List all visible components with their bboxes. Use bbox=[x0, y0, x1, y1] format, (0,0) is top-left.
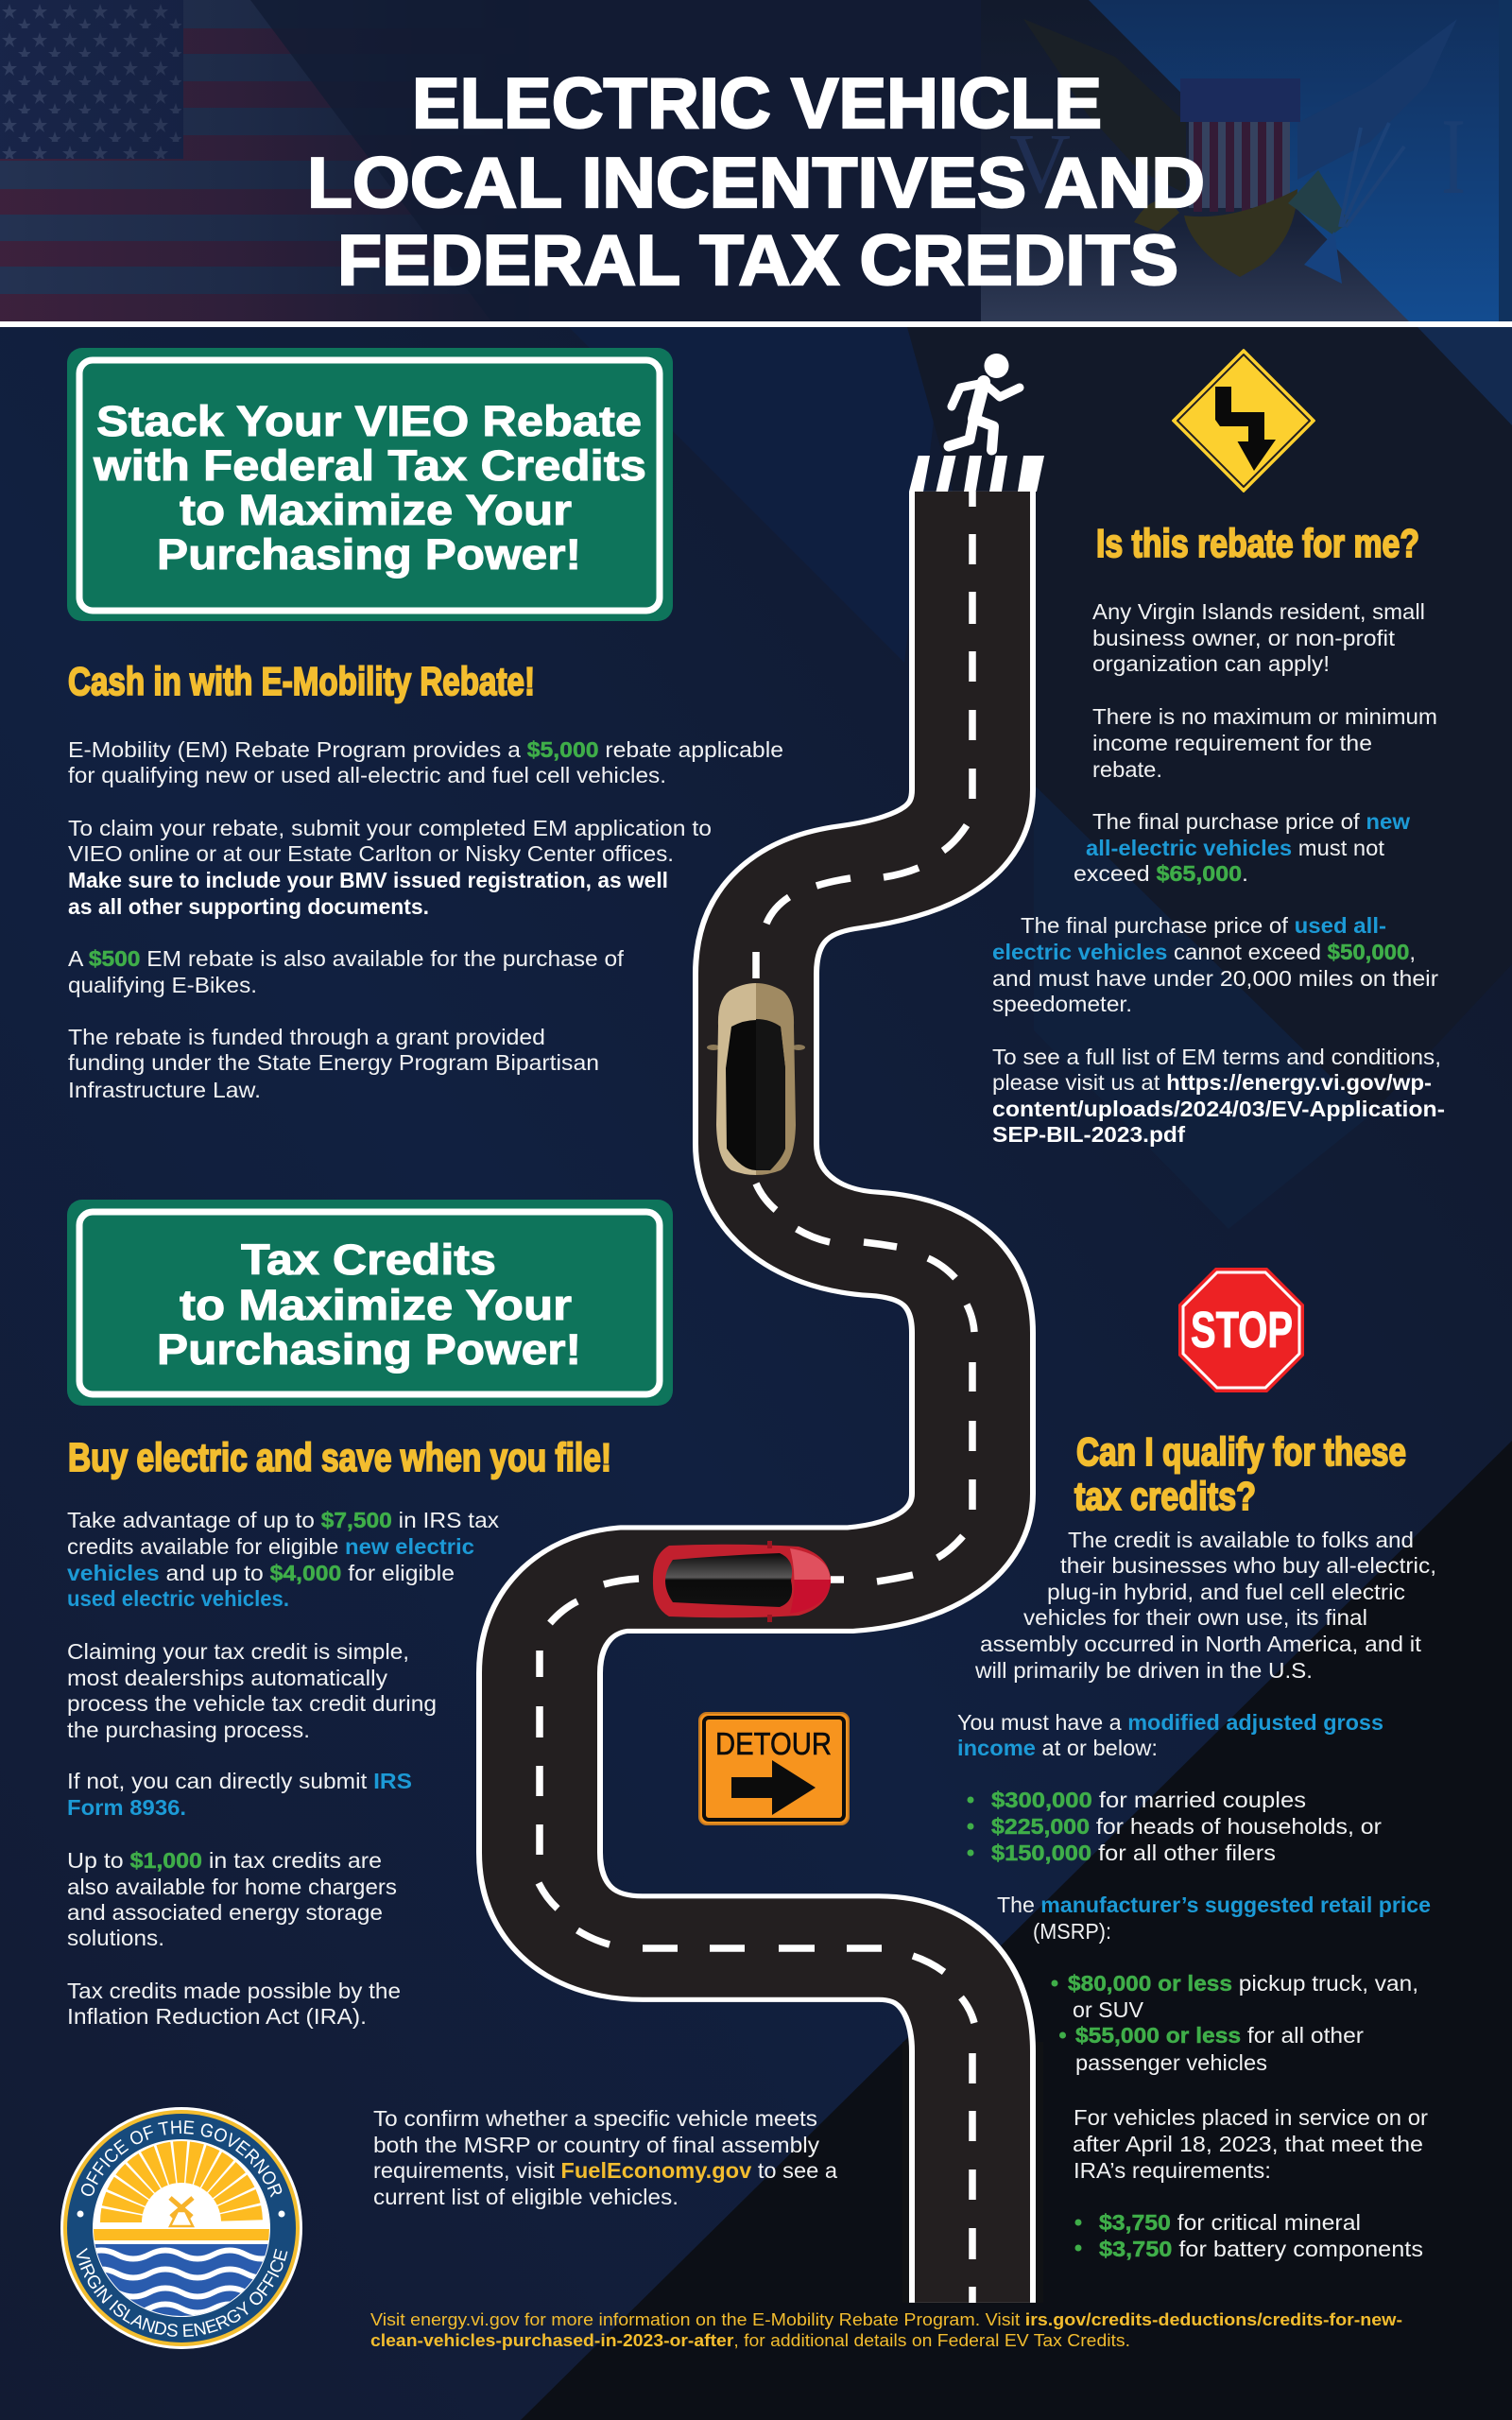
text block: confirm vehicle eligibility: current list of eligible vehicles. bbox=[373, 2185, 679, 2209]
text block: tax credit details: solutions. bbox=[67, 1926, 164, 1950]
text block: tax credit details: Tax credits made possible by the bbox=[67, 1979, 401, 2003]
title: ELECTRIC VEHICLE bbox=[412, 63, 1102, 143]
text block: rebate eligibility: exceed $65,000. bbox=[1074, 861, 1248, 886]
heading: is this rebate for me: Is this rebate for me? bbox=[1096, 521, 1419, 565]
text block: e-mobility rebate: To claim your rebate, submit your completed EM application to bbox=[68, 816, 712, 840]
text block: tax credit details: most dealerships automatically bbox=[67, 1666, 387, 1690]
text block: tax credit details: Up to $1,000 in tax credits are bbox=[67, 1848, 382, 1873]
text block: rebate eligibility: business owner, or non-profit bbox=[1092, 626, 1395, 650]
text block: qualification: will primarily be driven in the U.S. bbox=[974, 1658, 1313, 1683]
list: component credits: $3,750 for battery components bbox=[1099, 2237, 1423, 2261]
footer note: clean-vehicles-purchased-in-2023-or-after , for additional details on Federal EV Tax Credits. bbox=[370, 2331, 1130, 2350]
text block: qualification: their businesses who buy all-electric, bbox=[1060, 1553, 1436, 1578]
Virgin Islands flag: I bbox=[1441, 96, 1466, 216]
green sign: stack rebate: to Maximize Your bbox=[180, 486, 572, 534]
text block: e-mobility rebate bbox=[68, 737, 783, 1102]
text block: rebate eligibility bbox=[992, 599, 1445, 1147]
text block: rebate eligibility: income requirement for the bbox=[1092, 731, 1372, 755]
green sign: stack rebate bbox=[67, 348, 673, 621]
icon: crosswalk bbox=[909, 456, 1044, 492]
text block: tax credit details: If not, you can directly submit IRS bbox=[67, 1769, 412, 1793]
list: MSRP limits: $80,000 or less pickup truck, van, bbox=[1068, 1971, 1418, 1996]
text block: confirm vehicle eligibility bbox=[373, 2106, 838, 2209]
header banner with flags bbox=[0, 0, 1512, 327]
title: LOCAL INCENTIVES AND bbox=[307, 143, 1205, 222]
text block: qualification: The manufacturer’s suggested retail price bbox=[997, 1893, 1431, 1917]
eagle wings bbox=[1023, 19, 1186, 194]
Virgin Islands flag bbox=[981, 0, 1512, 321]
text block: confirm vehicle eligibility: To confirm whether a specific vehicle meets bbox=[373, 2106, 817, 2131]
list: income limits: $300,000 for married couples bbox=[991, 1788, 1306, 1812]
text block: e-mobility rebate: The rebate is funded through a grant provided bbox=[68, 1025, 545, 1049]
text block: e-mobility rebate: Infrastructure Law. bbox=[68, 1078, 261, 1102]
text block: rebate eligibility: content/uploads/2024/03/EV-Application- bbox=[992, 1097, 1445, 1121]
text block: qualification: assembly occurred in North America, and it bbox=[980, 1632, 1421, 1656]
text block: tax credit details: and associated energy storage bbox=[67, 1900, 383, 1925]
text block: qualification: The credit is available to folks and bbox=[1068, 1528, 1414, 1552]
logo: Virgin Islands Energy Office: OFFICE OF THE GOVERNOR bbox=[81, 2120, 282, 2198]
text block: e-mobility rebate: for qualifying new or used all-electric and fuel cell vehicles. bbox=[68, 763, 666, 787]
talons and arrows bbox=[1288, 170, 1349, 234]
text block: rebate eligibility: speedometer. bbox=[992, 992, 1132, 1016]
logo: Virgin Islands Energy Office: VIRGIN ISLANDS ENERGY OFFICE bbox=[76, 2248, 287, 2337]
green sign: tax credits: Tax Credits bbox=[241, 1236, 496, 1284]
text block: rebate eligibility: The final purchase price of used all- bbox=[1021, 913, 1386, 938]
footer note bbox=[370, 2310, 1402, 2350]
text block: qualification: For vehicles placed in service on or bbox=[1074, 2105, 1428, 2130]
text block: e-mobility rebate: VIEO online or at our Estate Carlton or Nisky Center offices. bbox=[68, 841, 674, 866]
green sign: tax credits bbox=[67, 1200, 673, 1406]
text block: rebate eligibility: To see a full list of EM terms and conditions, bbox=[992, 1045, 1441, 1069]
list: component credits bbox=[1075, 2210, 1423, 2261]
eagle tail bbox=[1184, 189, 1297, 277]
text block: e-mobility rebate: qualifying E-Bikes. bbox=[68, 973, 257, 997]
text block: qualification: vehicles for their own use, its final bbox=[1023, 1605, 1367, 1630]
text block: tax credit details: Take advantage of up to $7,500 in IRS tax bbox=[67, 1508, 499, 1532]
green sign: stack rebate: Purchasing Power! bbox=[157, 530, 581, 579]
heading: buy electric: Buy electric and save when you file! bbox=[68, 1435, 611, 1479]
text block: e-mobility rebate: as all other supporting documents. bbox=[68, 894, 429, 919]
text block: confirm vehicle eligibility: both the MSRP or country of final assembly bbox=[373, 2133, 819, 2157]
list: MSRP limits bbox=[1051, 1971, 1418, 2075]
text block: tax credit details: Form 8936. bbox=[67, 1795, 186, 1820]
list: component credits: $3,750 for critical mineral bbox=[1099, 2210, 1361, 2235]
list: MSRP limits: or SUV bbox=[1073, 1997, 1143, 2022]
text block: tax credit details: Claiming your tax credit is simple, bbox=[67, 1639, 409, 1664]
title: FEDERAL TAX CREDITS bbox=[337, 220, 1178, 300]
text block: tax credit details: Inflation Reduction Act (IRA). bbox=[67, 2004, 367, 2029]
list: income limits bbox=[968, 1788, 1382, 1865]
US flag bbox=[0, 0, 529, 321]
heading: cash in: Cash in with E-Mobility Rebate! bbox=[68, 659, 535, 703]
text block: rebate eligibility: SEP-BIL-2023.pdf bbox=[992, 1122, 1185, 1147]
road bbox=[539, 492, 1043, 2303]
text block: confirm vehicle eligibility: requirements, visit FuelEconomy.gov to see a bbox=[373, 2158, 838, 2183]
text block: rebate eligibility: Any Virgin Islands resident, small bbox=[1092, 599, 1425, 624]
icon: stop sign bbox=[1178, 1268, 1304, 1392]
icon: windmill bbox=[170, 2198, 193, 2226]
text block: qualification: IRA’s requirements: bbox=[1074, 2158, 1271, 2183]
text block: rebate eligibility: The final purchase price of new bbox=[1092, 809, 1411, 834]
text block: rebate eligibility: organization can apply! bbox=[1092, 651, 1330, 676]
icon: stop sign: STOP bbox=[1191, 1302, 1293, 1358]
flag letters: V bbox=[1009, 117, 1071, 211]
text block: qualification: plug-in hybrid, and fuel cell electric bbox=[1047, 1580, 1405, 1604]
text block: tax credit details: used electric vehicles. bbox=[67, 1586, 289, 1611]
text block: rebate eligibility: all-electric vehicles must not bbox=[1086, 836, 1384, 860]
green sign: tax credits: Purchasing Power! bbox=[157, 1325, 581, 1374]
icon: detour sign bbox=[699, 1713, 849, 1824]
list: income limits: $150,000 for all other filers bbox=[991, 1841, 1276, 1865]
list: income limits: $225,000 for heads of households, or bbox=[991, 1814, 1382, 1839]
title bbox=[307, 63, 1205, 300]
text block: tax credit details: vehicles and up to $4,000 for eligible bbox=[67, 1561, 455, 1585]
text block: tax credit details: the purchasing process. bbox=[67, 1718, 310, 1742]
icon: red car bbox=[653, 1541, 831, 1622]
list: MSRP limits: passenger vehicles bbox=[1075, 2050, 1267, 2075]
heading: can I qualify: tax credits? bbox=[1074, 1474, 1256, 1518]
text block: rebate eligibility: There is no maximum or minimum bbox=[1092, 704, 1437, 729]
text block: rebate eligibility: and must have under 20,000 miles on their bbox=[992, 966, 1438, 991]
text block: qualification: (MSRP): bbox=[1033, 1919, 1111, 1944]
logo: Virgin Islands Energy Office bbox=[60, 2107, 302, 2349]
icon: tan car bbox=[707, 983, 805, 1175]
green sign: tax credits: to Maximize Your bbox=[180, 1281, 572, 1329]
icon: detour sign: DETOUR bbox=[715, 1726, 832, 1761]
icon: running pedestrian bbox=[949, 354, 1020, 450]
text block: rebate eligibility: electric vehicles cannot exceed $50,000, bbox=[992, 940, 1416, 964]
text block: tax credit details: also available for home chargers bbox=[67, 1875, 397, 1899]
icon: winding road sign bbox=[1173, 350, 1314, 492]
heading: can I qualify bbox=[1074, 1429, 1406, 1518]
green sign: stack rebate: with Federal Tax Credits bbox=[93, 441, 646, 490]
text block: qualification: income at or below: bbox=[957, 1736, 1158, 1760]
text block: tax credit details: credits available for eligible new electric bbox=[67, 1534, 474, 1559]
heading: can I qualify: Can I qualify for these bbox=[1076, 1429, 1406, 1474]
road centre dashes bbox=[539, 492, 974, 2303]
footer note: Visit energy.vi.gov for more information on the E-Mobility Rebate Program. Visit irs.gov/credits-deductions/credits-for-new- bbox=[370, 2310, 1402, 2329]
text block: qualification bbox=[957, 1528, 1436, 2261]
text block: qualification: after April 18, 2023, that meet the bbox=[1073, 2132, 1423, 2156]
list: MSRP limits: $55,000 or less for all other bbox=[1075, 2023, 1364, 2048]
text block: qualification: You must have a modified adjusted gross bbox=[957, 1710, 1383, 1735]
green sign: stack rebate: Stack Your VIEO Rebate bbox=[96, 397, 642, 445]
text block: e-mobility rebate: Make sure to include your BMV issued registration, as well bbox=[68, 868, 668, 892]
text block: e-mobility rebate: E-Mobility (EM) Rebate Program provides a $5,000 rebate applicable bbox=[68, 737, 783, 762]
text block: rebate eligibility: please visit us at https://energy.vi.gov/wp- bbox=[992, 1070, 1432, 1095]
text block: rebate eligibility: rebate. bbox=[1092, 757, 1162, 782]
text block: tax credit details: process the vehicle tax credit during bbox=[67, 1691, 437, 1716]
text block: tax credit details bbox=[67, 1508, 499, 2029]
shield bbox=[1180, 78, 1300, 122]
text block: e-mobility rebate: A $500 EM rebate is also available for the purchase of bbox=[68, 946, 624, 971]
text block: e-mobility rebate: funding under the State Energy Program Bipartisan bbox=[68, 1050, 599, 1075]
